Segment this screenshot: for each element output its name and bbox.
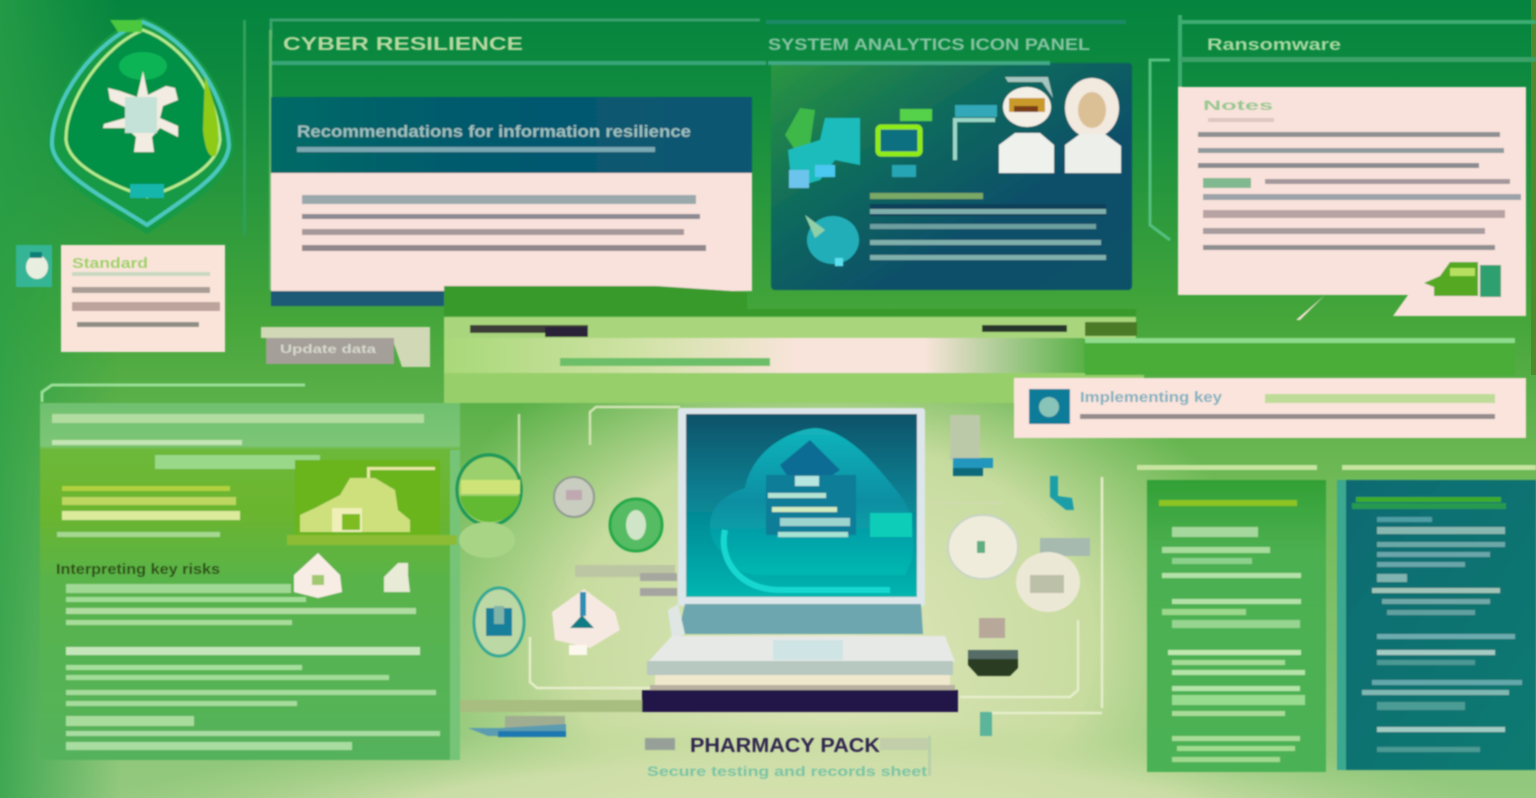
icon: white tree badge — [294, 553, 342, 598]
panel heading: Ransomware — [1207, 35, 1341, 54]
icon: person — [1065, 78, 1121, 173]
title block — [645, 735, 931, 779]
dark title box: Recommendations for information resilience — [297, 122, 691, 141]
subheading: Interpreting key risks — [56, 561, 220, 578]
laptop base bar — [642, 690, 958, 712]
icon: small teal badge — [16, 245, 52, 287]
speech card — [1178, 87, 1526, 320]
guidance text — [66, 584, 440, 750]
intro text — [52, 414, 424, 445]
screen form lines — [766, 475, 856, 537]
dark title box — [271, 97, 752, 173]
panel: central diagram frame — [519, 407, 1102, 713]
tag label — [261, 327, 430, 367]
icon: white pin — [552, 589, 620, 655]
small diagram note — [575, 565, 677, 596]
icon: person with helmet — [999, 77, 1054, 173]
icon: callout badge — [1029, 389, 1070, 424]
icon: lime monitor — [878, 109, 932, 177]
laptop bezel — [678, 408, 925, 606]
icon: small green chart — [1424, 262, 1501, 297]
icon: teal badge — [474, 588, 524, 656]
icon: bug glyph — [103, 71, 178, 152]
laptop screen — [686, 414, 917, 597]
icon: teal globe — [805, 215, 859, 266]
panel heading: CYBER RESILIENCE — [283, 34, 523, 54]
note card — [61, 245, 225, 352]
speech card: Notes — [1203, 97, 1273, 113]
icon: dark camera — [968, 618, 1018, 676]
icon: green shield — [610, 499, 662, 551]
laptop illustration — [460, 408, 958, 712]
title: PHARMACY PACK — [690, 735, 881, 757]
icon: white lock — [384, 563, 410, 592]
icon: grey lock — [554, 477, 594, 517]
tag label: Update data — [280, 342, 376, 356]
panel: green list — [1137, 465, 1326, 772]
panel: cyber resilience — [243, 20, 766, 306]
icon: blue-green cluster — [785, 108, 860, 188]
callout — [1014, 378, 1526, 438]
text card — [271, 173, 752, 291]
info lines — [870, 193, 1106, 260]
subtitle: Secure testing and records sheet — [647, 763, 927, 779]
panel: analytics — [766, 20, 1132, 290]
panel: left guidance — [40, 385, 460, 760]
panel: teal list — [1337, 465, 1536, 770]
laptop keyboard — [678, 604, 923, 634]
icon: water cluster — [468, 716, 566, 737]
panel heading: SYSTEM ANALYTICS ICON PANEL — [768, 35, 1090, 54]
lime text block — [57, 455, 320, 537]
icon: shield pin with bug — [48, 17, 234, 234]
icon: network rings — [948, 515, 1090, 612]
laptop deck — [648, 636, 955, 662]
icon: teal arrow — [1050, 476, 1074, 510]
icon: village illustration — [287, 460, 457, 545]
icon: blue mug — [950, 415, 993, 476]
panel: central bands — [444, 286, 1515, 403]
icon: green orb — [457, 455, 521, 558]
note heading: Standard — [72, 255, 148, 272]
callout: Implementing key — [1080, 389, 1223, 406]
panel: recommendations — [1150, 15, 1536, 320]
